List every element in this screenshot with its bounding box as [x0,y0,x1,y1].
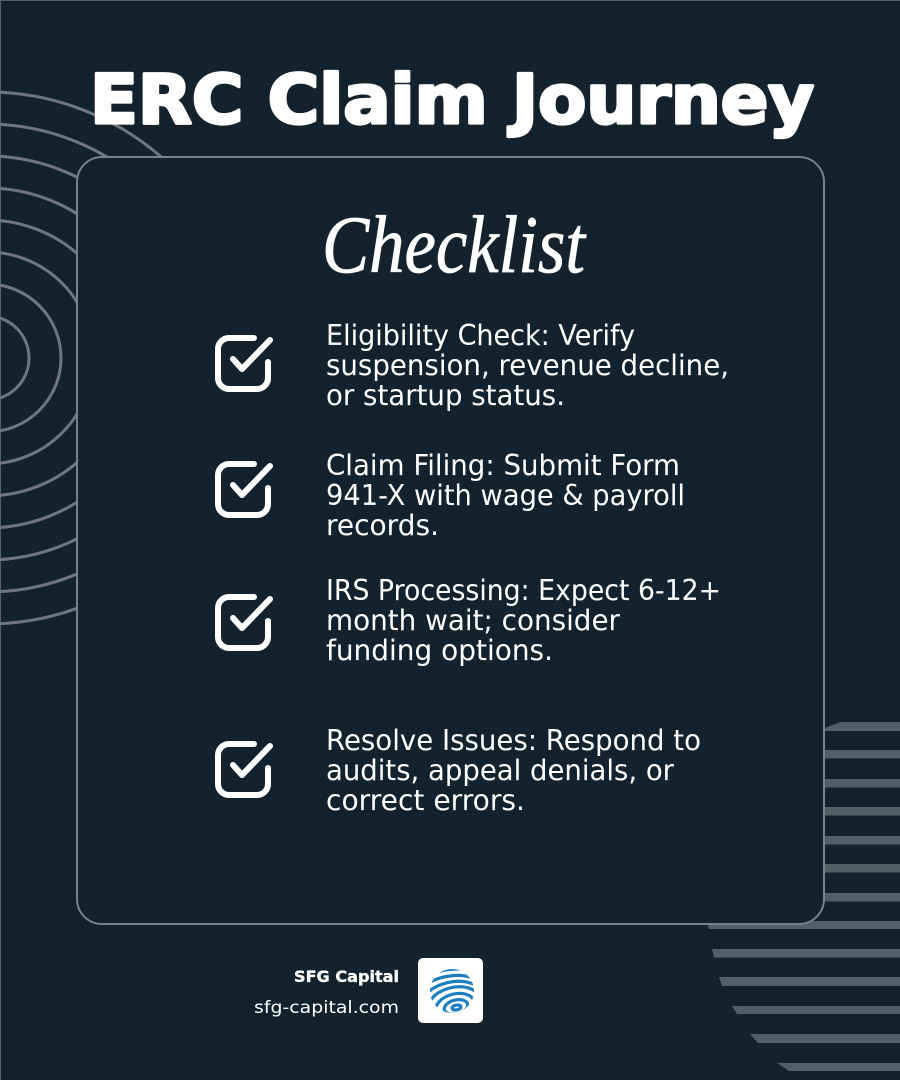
text: resolve issues [326,724,701,817]
text: claim filing: records. [326,509,439,542]
text: claim filing [326,449,685,542]
text: resolve issues: Resolve Issues: Respond to [326,724,701,757]
icon: checkbox 3 [218,597,270,648]
text: IRS processing [326,574,721,667]
heading: Checklist: Checklist [322,199,587,290]
icon: checkbox 2 [218,464,270,515]
text: claim filing: 941-X with wage & payroll [326,479,685,512]
text: resolve issues: audits, appeal denials, or [326,754,674,787]
text: IRS processing: IRS Processing: Expect 6-12+ [326,574,721,607]
footer: brand name and URL: SFG Capital [294,967,399,986]
text: eligibility check: or startup status. [326,379,565,412]
icon: SFG Capital globe logo [418,958,483,1023]
text: IRS processing: funding options. [326,634,553,667]
icon: checkbox 1 [218,338,270,389]
panel: checklist card [77,157,824,924]
text: eligibility check: Eligibility Check: Verify [326,319,635,352]
text: eligibility check: suspension, revenue decline, [326,349,729,382]
icon: checkbox 4 [218,744,270,795]
text: eligibility check [326,319,729,412]
title: ERC Claim Journey [90,61,814,140]
footer: brand name and URL: sfg-capital.com [254,998,399,1018]
text: resolve issues: correct errors. [326,784,525,817]
text: IRS processing: month wait; consider [326,604,620,637]
footer: brand name and URL [254,967,399,1018]
text: claim filing: Claim Filing: Submit Form [326,449,680,482]
